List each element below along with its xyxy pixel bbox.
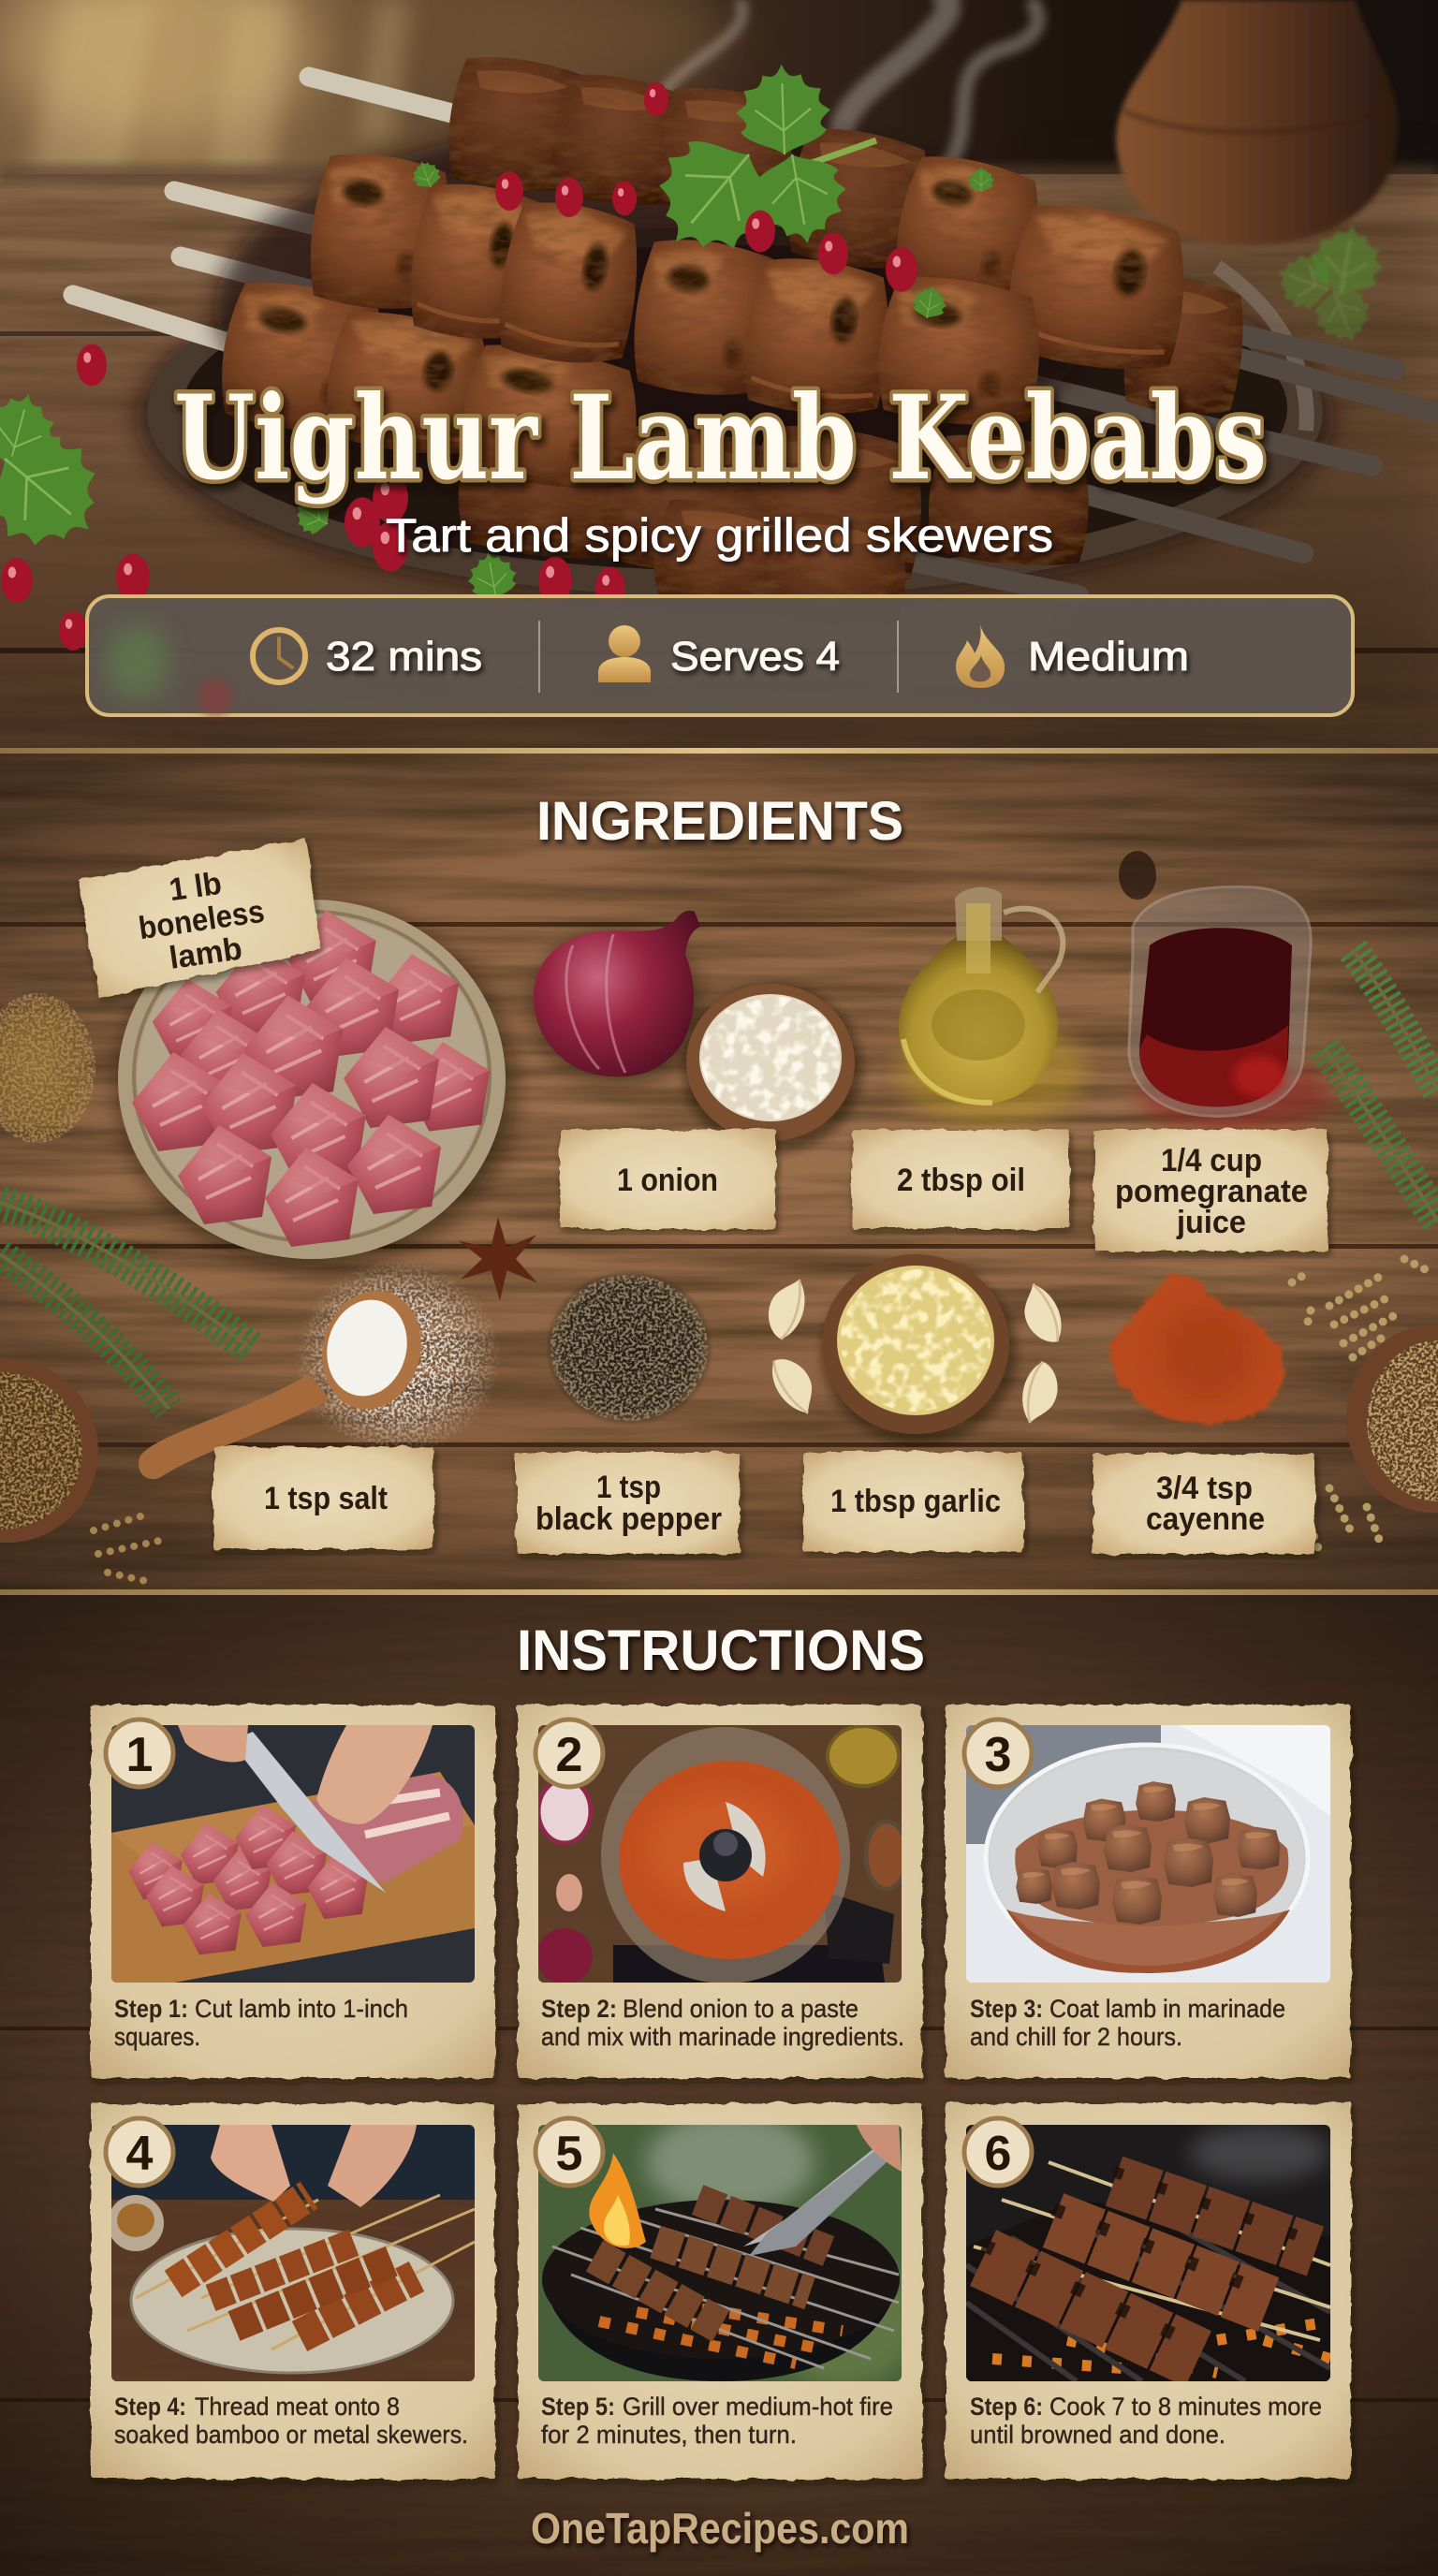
label: black pepper: black pepper (536, 1501, 722, 1537)
stat: servings: Serves 4 (670, 634, 840, 680)
step card 1 (91, 1705, 495, 2078)
step 4 text (114, 2393, 468, 2449)
number badge 1 (106, 1720, 173, 1787)
garlic bowl and cloves (760, 1254, 1068, 1444)
cilantro garnish (407, 63, 994, 321)
step 2 text: Step 2: (541, 1995, 617, 2023)
backdrop with golden light (0, 0, 1438, 187)
label: pomegranate juice: pomegranate (1115, 1174, 1308, 1209)
wooden table (0, 165, 1438, 751)
stat: difficulty: Medium (1028, 634, 1189, 680)
step 1 text: squares. (114, 2023, 200, 2051)
number badge 4: 4 (126, 2127, 154, 2181)
number badge 6: 6 (985, 2127, 1011, 2181)
label: black pepper (516, 1452, 740, 1554)
step 5 image: grilling over fire (538, 2111, 917, 2387)
wood background (0, 751, 1438, 1591)
cumin pile left (0, 993, 95, 1143)
step 5 text: Step 5: (541, 2393, 615, 2421)
black pepper pile (545, 1269, 713, 1427)
step 4 image: threading skewers (108, 2125, 475, 2381)
number badge 3 (964, 1720, 1032, 1787)
step 6 text (970, 2393, 1322, 2449)
step 4 text: Step 4: (114, 2393, 186, 2421)
red onion (534, 911, 702, 1086)
number badge 5: 5 (556, 2127, 582, 2181)
step 2 text (541, 1995, 904, 2051)
number badge 5 (536, 2118, 603, 2186)
label: lamb: boneless (137, 894, 267, 946)
label: onion (560, 1130, 775, 1229)
number badge 6 (964, 2118, 1032, 2186)
skewers (73, 77, 1438, 595)
label: garlic (803, 1452, 1023, 1552)
step 4 text: soaked bamboo or metal skewers. (114, 2421, 468, 2449)
clay jug (1116, 0, 1399, 245)
oil jug (899, 887, 1086, 1128)
step card 4 (91, 2103, 495, 2479)
label: cayenne: cayenne (1146, 1501, 1265, 1537)
step 3 text (970, 1995, 1285, 2051)
label: salt (213, 1447, 433, 1549)
footer website: OneTapRecipes.com (531, 2504, 909, 2553)
number badge 1: 1 (126, 1728, 153, 1782)
label: cayenne: 3/4 tsp (1156, 1471, 1253, 1506)
step 5 text: Grill over medium-hot fire (623, 2393, 893, 2421)
step 2 image: blending marinade (536, 1725, 907, 1984)
step 3 text: Step 3: (970, 1995, 1043, 2023)
step card 6 (946, 2103, 1351, 2479)
cayenne pile (1109, 1275, 1285, 1425)
step 1 text (114, 1995, 408, 2051)
step 3 text: Coat lamb in marinade (1049, 1995, 1285, 2023)
step 2 text: Blend onion to a paste (623, 1995, 858, 2023)
step 2 text: and mix with marinade ingredients. (541, 2023, 904, 2051)
spice bowl left (0, 1359, 164, 1582)
stats bar (87, 596, 1353, 716)
panel: ingredients (0, 751, 1438, 1591)
plate of raw lamb cubes (118, 900, 515, 1267)
number badge 4 (106, 2118, 173, 2186)
icon: clock (253, 630, 305, 682)
rosemary right (1325, 950, 1438, 1222)
panel: instructions (0, 1591, 1438, 2576)
step 6 text: until browned and done. (970, 2421, 1225, 2449)
step 6 image: finished kebabs on grill (966, 2125, 1330, 2381)
label: lamb: lamb (167, 930, 244, 976)
number badge 3: 3 (985, 1728, 1011, 1782)
step 5 text: for 2 minutes, then turn. (541, 2421, 797, 2449)
label: garlic: 1 tbsp garlic (830, 1484, 1001, 1519)
pomegranate seeds (1, 82, 917, 651)
panel: hero photo of lamb kebabs (0, 0, 1438, 751)
step 6 text: Cook 7 to 8 minutes more (1049, 2393, 1322, 2421)
steam (655, 0, 1038, 168)
shadow beneath meat (215, 122, 1095, 496)
bowl of chopped onion (682, 984, 862, 1153)
label: pomegranate juice (1094, 1129, 1328, 1251)
label: cayenne (1093, 1454, 1314, 1554)
step 1 text: Cut lamb into 1-inch (195, 1995, 408, 2023)
table herbs (0, 219, 1389, 604)
pomegranate juice cup (1129, 886, 1334, 1133)
grilled lamb cubes (213, 51, 1254, 633)
step 4 text: Thread meat onto 8 (195, 2393, 400, 2421)
number badge 2 (536, 1720, 603, 1787)
dark wood background (0, 1591, 1438, 2576)
icon: flame (956, 624, 1005, 688)
label: onion: 1 onion (617, 1163, 718, 1198)
step card 5 (518, 2103, 922, 2479)
scattered seeds right (1292, 1259, 1432, 1554)
step 6 text: Step 6: (970, 2393, 1043, 2421)
step 3 image: marinating bowl (966, 1725, 1330, 1983)
label: pomegranate juice: juice (1176, 1205, 1246, 1240)
ingredients heading: INGREDIENTS (536, 791, 903, 852)
label: oil: 2 tbsp oil (897, 1163, 1025, 1198)
step 1 text: Step 1: (114, 1995, 188, 2023)
step card 2 (518, 1705, 922, 2078)
subtitle: Tart and spicy grilled skewers (386, 509, 1053, 562)
step 1 image: cutting lamb (111, 1725, 475, 1983)
instructions heading: INSTRUCTIONS (517, 1618, 925, 1682)
label: lamb: 1 lb (167, 866, 224, 908)
icon: person (598, 625, 651, 682)
label: lamb (79, 839, 321, 999)
step 5 text (541, 2393, 893, 2449)
rosemary left (0, 1203, 251, 1409)
stat: time: 32 mins (326, 634, 482, 680)
salt and wooden spoon (139, 1259, 501, 1479)
step 3 text: and chill for 2 hours. (970, 2023, 1182, 2051)
serving plate (136, 227, 1334, 605)
label: pomegranate juice: 1/4 cup (1161, 1143, 1262, 1178)
star anise (459, 1217, 537, 1301)
label: oil (853, 1130, 1069, 1229)
number badge 2: 2 (556, 1728, 582, 1782)
step card 3 (946, 1705, 1351, 2078)
label: salt: 1 tsp salt (264, 1481, 388, 1516)
label: black pepper: 1 tsp (596, 1470, 661, 1505)
spice bowl right (1346, 1325, 1438, 1513)
